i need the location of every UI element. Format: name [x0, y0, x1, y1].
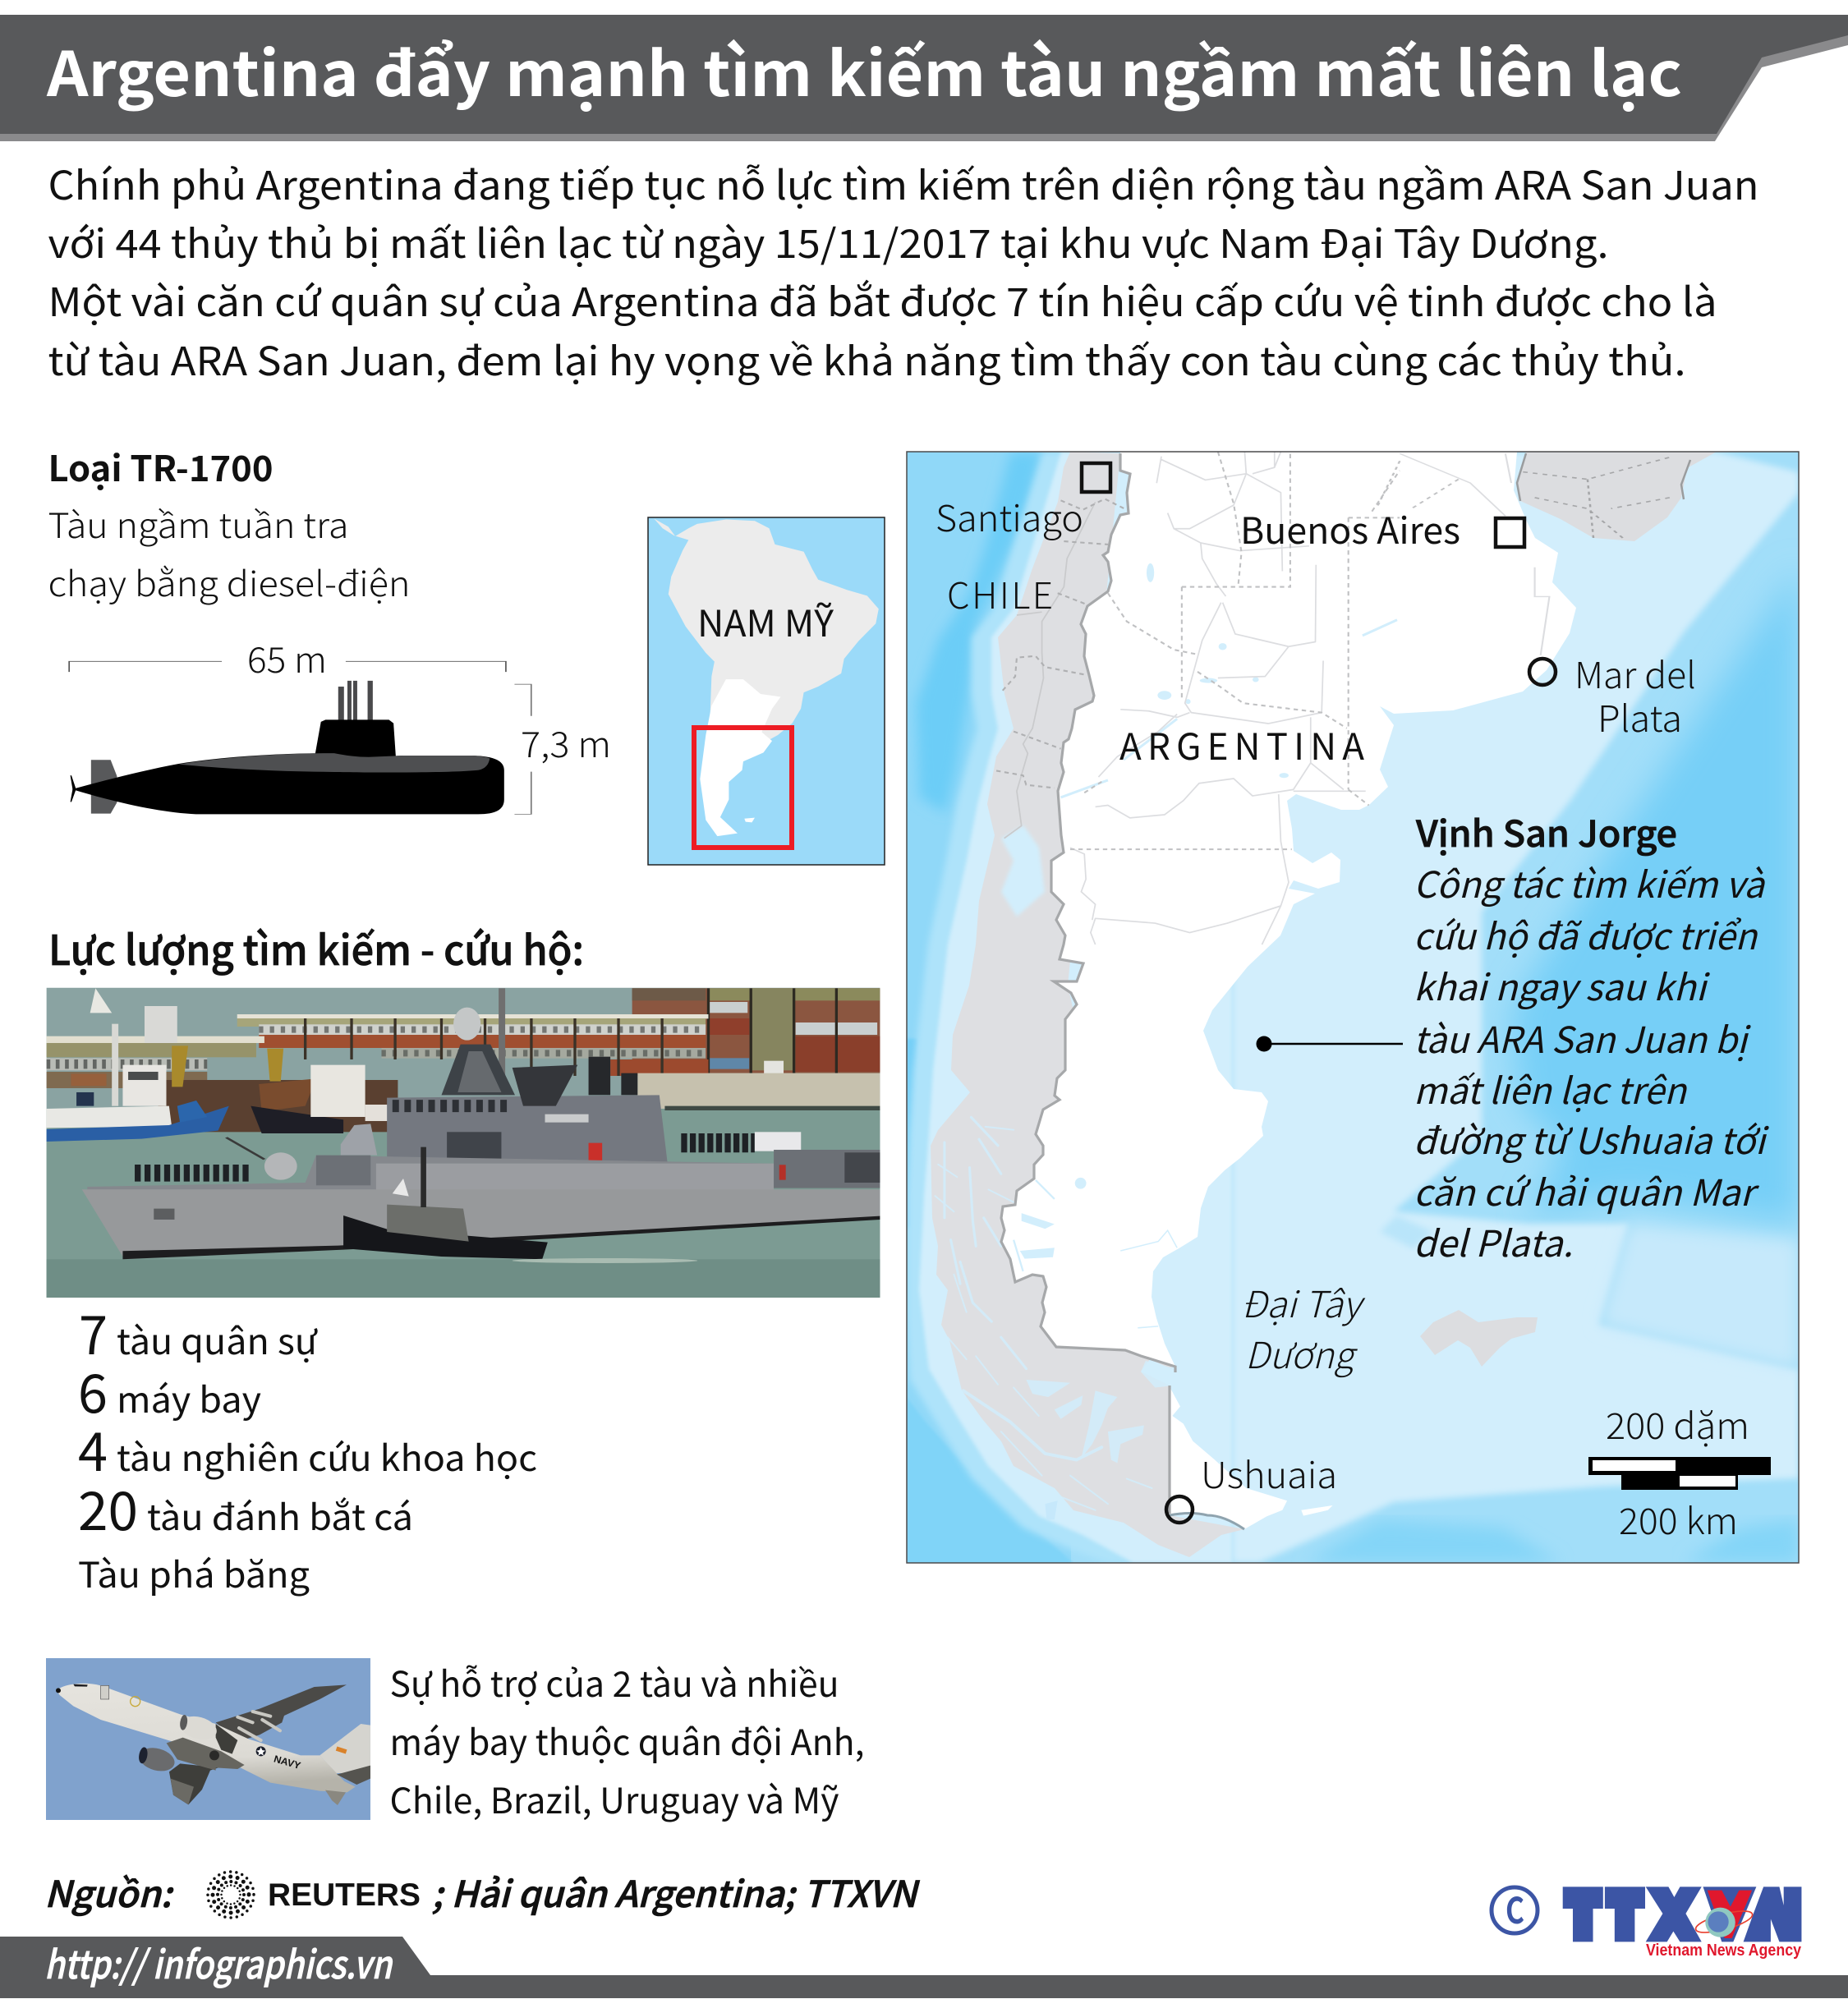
land: Argentina — [1001, 452, 1576, 1367]
website link text: http:// infographics.vn — [44, 1933, 393, 1990]
leader line and dot — [1257, 1036, 1403, 1051]
list of deployed forces — [78, 1293, 537, 1598]
label: Atlantic Ocean: Đại Tây — [1241, 1275, 1366, 1328]
section heading: search and rescue forces: Lực lượng tìm kiếm - cứu hộ: — [48, 918, 584, 977]
label: Ushuaia: Ushuaia — [1201, 1446, 1337, 1499]
aircraft support text: máy bay thuộc quân đội Anh, — [389, 1715, 864, 1766]
callout: Golfo San Jorge — [1414, 805, 1770, 1267]
logo: TTXVN: Vietnam News Agency — [1646, 1942, 1802, 1960]
source line: REUTERS — [268, 1877, 421, 1913]
aircraft markings: NAVY — [273, 1753, 302, 1772]
title: Argentina đẩy mạnh tìm kiếm tàu ngầm mất liên lạc — [46, 25, 1682, 114]
item: 6 aircraft: 6 — [78, 1351, 108, 1428]
marker: Ushuaia — [1166, 1496, 1193, 1523]
intro text block: với 44 thủy thủ bị mất liên lạc từ ngày 15/11/2017 tại khu vực Nam Đại Tây Dương. — [48, 212, 1608, 269]
submarine type text: Loại TR-1700 — [48, 441, 273, 492]
item: 4 research ships: tàu nghiên cứu khoa học — [117, 1431, 537, 1482]
label: Nam Mỹ: NAM MỸ — [697, 595, 834, 647]
callout: Golfo San Jorge: cứu hộ đã được triển — [1414, 908, 1758, 960]
item: 7 warships: 7 — [79, 1293, 108, 1370]
callout: Golfo San Jorge: mất liên lạc trên — [1414, 1062, 1688, 1114]
item: 4 research ships — [78, 1409, 537, 1487]
red locator box — [694, 728, 792, 848]
west shelf — [919, 452, 1232, 1563]
northeast road and border network — [1377, 453, 1670, 655]
photo: patrol aircraft — [46, 1658, 370, 1820]
Falkland Islands — [1420, 1310, 1538, 1367]
aircraft support text: Chile, Brazil, Uruguay và Mỹ — [389, 1773, 839, 1824]
Tierra del Fuego — [1170, 1386, 1333, 1529]
logo: TTXVN — [1492, 1882, 1802, 1960]
intro text block: từ tàu ARA San Juan, đem lại hy vọng về khả năng tìm thấy con tàu cùng các thủy thủ. — [48, 329, 1685, 387]
marker: Mar del Plata — [1529, 659, 1556, 685]
item: 20 fishing boats — [78, 1468, 413, 1546]
source line — [44, 1865, 921, 1918]
label: Argentina: ARGENTINA — [1119, 718, 1364, 770]
source line: ; Hải quân Argentina; TTXVN — [432, 1865, 921, 1918]
aircraft support text: Sự hỗ trợ của 2 tàu và nhiều — [389, 1657, 839, 1707]
title banner — [0, 15, 1848, 141]
national borders — [1001, 453, 1175, 1514]
scale bar — [1588, 1397, 1771, 1545]
logo: TTXVN: C — [1506, 1882, 1524, 1934]
label: Chile: CHILE — [947, 567, 1055, 619]
east ocean depth — [1511, 567, 1799, 1224]
province borders — [996, 452, 1400, 849]
submarine diagram with dimensions — [69, 632, 611, 814]
intro text block: Chính phủ Argentina đang tiếp tục nỗ lực tìm kiếm trên diện rộng tàu ngầm ARA San Juan — [48, 154, 1759, 211]
aircraft support text — [389, 1657, 864, 1824]
callout: Golfo San Jorge: tàu ARA San Juan bị — [1414, 1011, 1752, 1064]
source line: Nguồn: — [44, 1865, 174, 1918]
submarine type text — [48, 441, 411, 607]
submarine diagram with dimensions: 7,3 m — [521, 717, 611, 768]
callout: Golfo San Jorge: del Plata. — [1414, 1215, 1573, 1267]
marker: Buenos Aires — [1496, 518, 1524, 547]
locator map: South America — [648, 517, 885, 865]
footer bar — [0, 1933, 1848, 1998]
land: Chile — [931, 452, 1244, 1557]
west ocean depth — [916, 452, 1042, 813]
item: 6 aircraft — [78, 1351, 261, 1428]
icon: Reuters logo — [208, 1872, 254, 1918]
continental shelf, east — [1232, 452, 1799, 1563]
label: Mar del Plata: Plata — [1597, 690, 1682, 742]
label: Buenos Aires: Buenos Aires — [1240, 502, 1460, 554]
photo: warship — [47, 988, 880, 1298]
callout: Golfo San Jorge: căn cứ hải quân Mar — [1414, 1164, 1760, 1216]
marker: Santiago — [1082, 463, 1110, 492]
callout: Golfo San Jorge: Công tác tìm kiếm và — [1414, 856, 1766, 908]
item: 7 warships: tàu quân sự — [117, 1314, 318, 1365]
callout: Golfo San Jorge: Vịnh San Jorge — [1415, 805, 1677, 857]
callout: Golfo San Jorge: đường từ Ushuaia tới — [1414, 1112, 1770, 1165]
west shelf edge band — [907, 452, 1124, 1561]
intro text block — [48, 154, 1759, 387]
item: icebreaker: Tàu phá băng — [78, 1547, 310, 1598]
item: 4 research ships: 4 — [78, 1409, 108, 1487]
callout: Golfo San Jorge: khai ngay sau khi — [1414, 958, 1711, 1011]
label: Mar del Plata: Mar del — [1574, 646, 1696, 699]
item: 7 warships — [79, 1293, 318, 1370]
submarine type text: chạy bằng diesel-điện — [48, 557, 411, 607]
lakes — [1061, 563, 1397, 797]
land: Uruguay and southern Brazil — [1517, 452, 1717, 541]
fjords and channels — [935, 1117, 1175, 1519]
main map panel — [907, 452, 1799, 1563]
label: Mar del Plata — [1574, 646, 1696, 742]
label: Atlantic Ocean: Dương — [1245, 1326, 1358, 1379]
item: 20 fishing boats: 20 — [78, 1468, 138, 1546]
label: Santiago: Santiago — [935, 489, 1083, 542]
label: Atlantic Ocean — [1241, 1275, 1366, 1379]
submarine diagram with dimensions: 65 m — [247, 632, 327, 683]
item: 20 fishing boats: tàu đánh bắt cá — [147, 1490, 413, 1541]
roads — [1004, 452, 1366, 944]
submarine type text: Tàu ngầm tuần tra — [48, 499, 348, 549]
scale bar: 200 dặm — [1606, 1397, 1749, 1450]
intro text block: Một vài căn cứ quân sự của Argentina đã bắt được 7 tín hiệu cấp cứu vệ tinh được cho là — [48, 270, 1717, 328]
scale bar: 200 km — [1619, 1492, 1738, 1545]
item: 6 aircraft: máy bay — [117, 1372, 261, 1423]
